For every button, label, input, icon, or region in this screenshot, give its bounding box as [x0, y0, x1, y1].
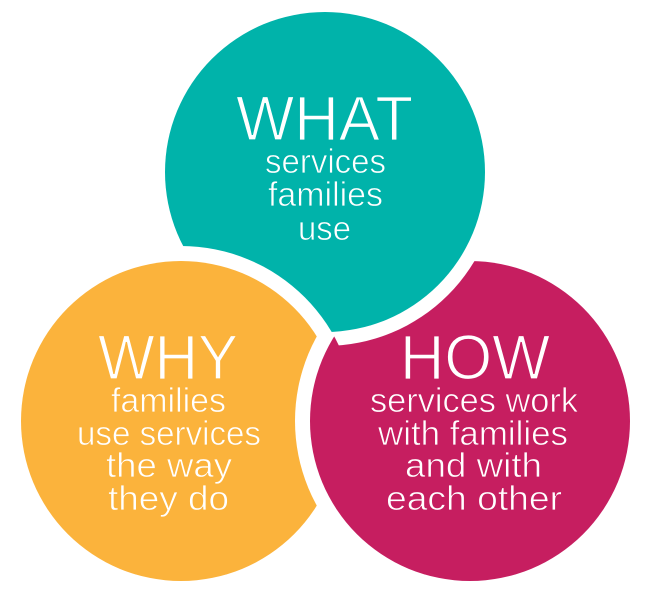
text: services work with families and with each other: and with — [405, 447, 542, 485]
heading: HOW: HOW — [400, 323, 551, 393]
text: families use services the way they do: families — [111, 382, 226, 420]
text: services families use: services — [265, 143, 386, 181]
text: services work with families and with each other: each other — [386, 480, 562, 518]
panel: WHAT circle — [165, 12, 485, 346]
heading: WHAT: WHAT — [236, 84, 413, 154]
text: services families use: families — [268, 176, 383, 214]
text: families use services the way they do: use services — [77, 415, 261, 453]
text: services families use — [266, 148, 384, 240]
text: services families use: use — [298, 210, 351, 248]
heading: WHY: WHY — [98, 323, 238, 393]
text: families use services the way they do — [77, 382, 261, 518]
panel: WHY circle — [21, 261, 341, 581]
text: services work with families and with each other: with families — [377, 415, 568, 453]
text: families use services the way they do: they do — [108, 480, 229, 518]
panel: HOW circle — [295, 246, 645, 596]
text: services work with families and with each other — [370, 382, 579, 518]
text: families use services the way they do: the way — [106, 447, 232, 485]
text: services work with families and with each other: services work — [370, 382, 579, 420]
